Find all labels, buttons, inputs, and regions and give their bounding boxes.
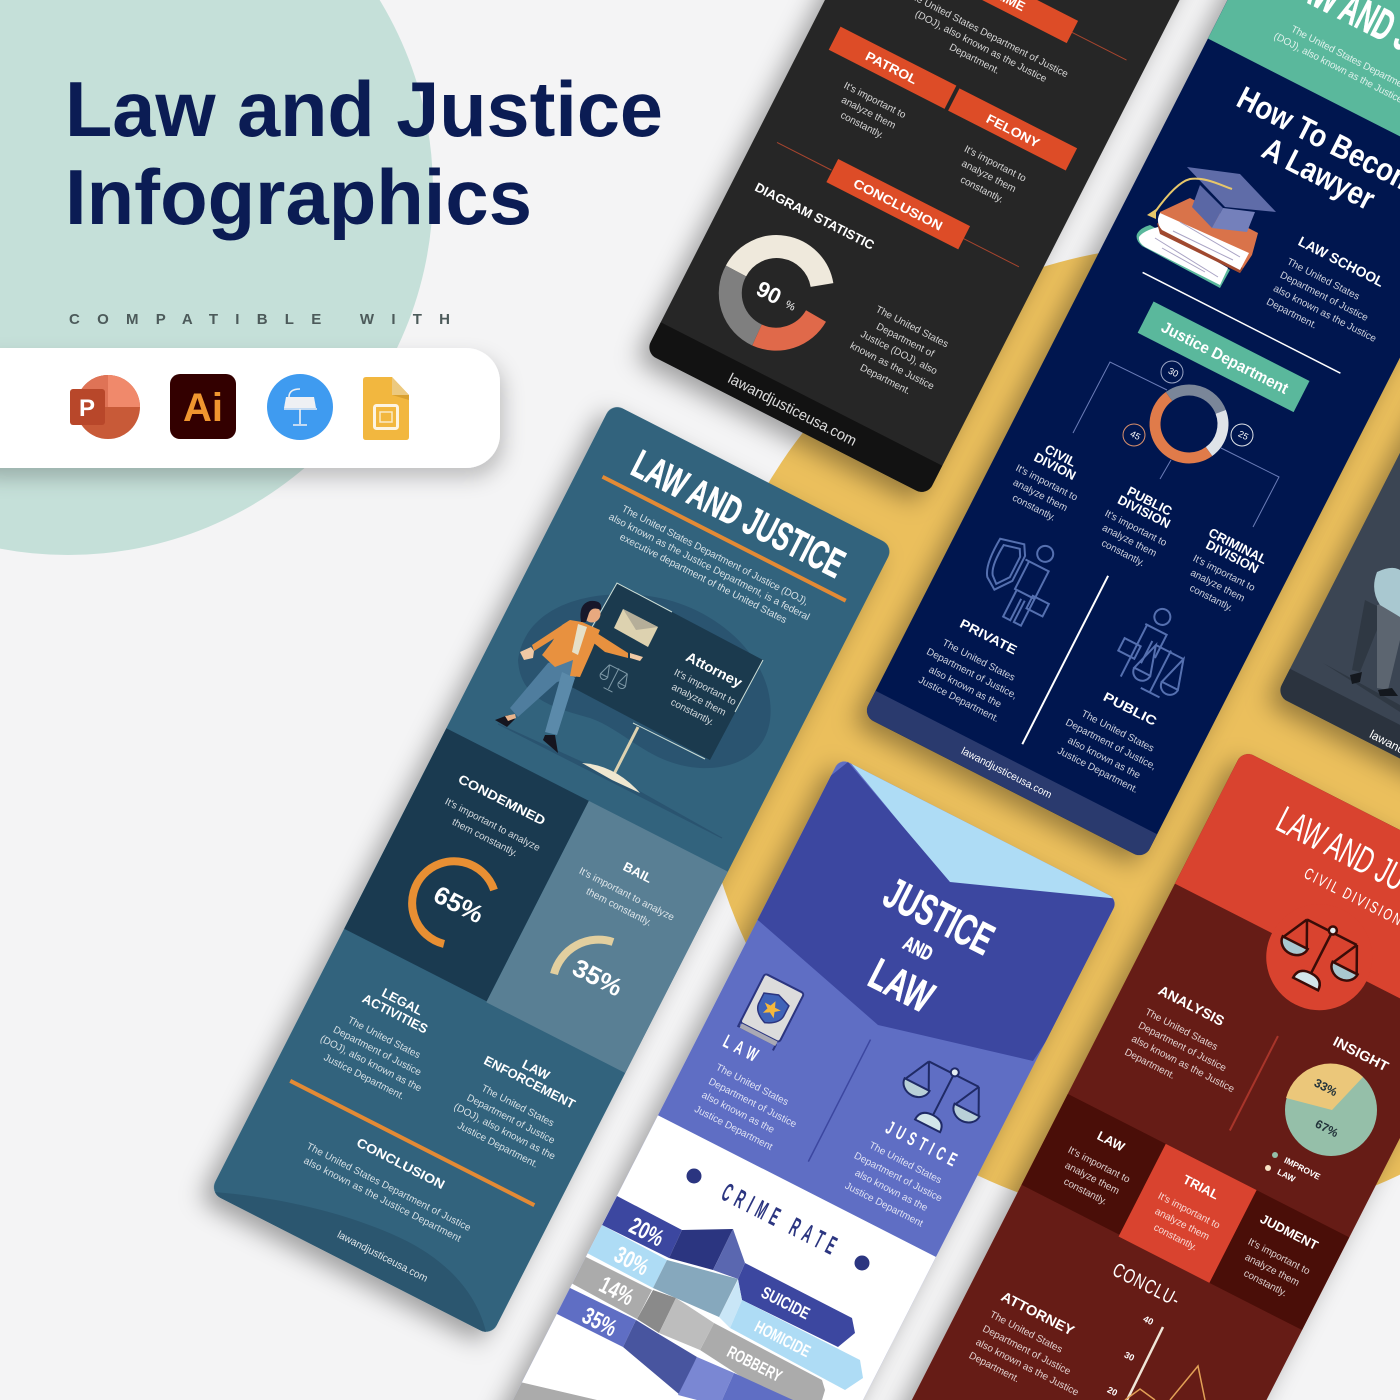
tag: crime xyxy=(982,0,1078,44)
patrol text xyxy=(841,82,906,138)
panel: law: analyze them xyxy=(1063,1160,1121,1197)
panel: judment: analyze them xyxy=(1243,1252,1301,1289)
mint background circle xyxy=(0,0,433,555)
attorney: ATTORNEY xyxy=(999,1288,1078,1339)
attorney text xyxy=(659,647,749,733)
civil division: CIVIL xyxy=(1042,441,1079,470)
criminal division: constantly. xyxy=(1188,583,1234,614)
analysis: Department of Justice xyxy=(1136,1020,1228,1074)
background blob xyxy=(518,594,771,768)
crime text: (DOJ), also known as the Justice xyxy=(913,9,1049,85)
civil division: analyze them xyxy=(1011,477,1069,514)
crime text: Department. xyxy=(947,42,1001,77)
line chart: 20 xyxy=(1106,1385,1119,1398)
progress ring 35% xyxy=(554,940,613,974)
law enforcement xyxy=(445,1038,590,1176)
title: AND xyxy=(899,932,936,966)
legal activities: Department of Justice xyxy=(331,1025,423,1079)
white lower section xyxy=(513,1115,936,1400)
title: LAW AND JUSTICE xyxy=(625,442,852,587)
law school: LAW SCHOOL xyxy=(1296,233,1387,290)
public xyxy=(1058,692,1156,793)
analysis xyxy=(1123,981,1263,1109)
panel: blue card xyxy=(490,758,1115,1400)
icon: books and graduation cap xyxy=(1137,167,1276,288)
pie chart xyxy=(1285,1064,1377,1156)
law enforcement: The United States xyxy=(479,1083,556,1129)
law enforcement: (DOJ), also known as the xyxy=(452,1102,557,1163)
criminal division: analyze them xyxy=(1188,568,1246,604)
public division: It's important to xyxy=(1103,508,1169,549)
attorney: Department of Justice xyxy=(981,1324,1073,1378)
public division: constantly. xyxy=(1099,538,1146,569)
donut value: % xyxy=(783,299,797,314)
panel: judment: constantly. xyxy=(1242,1268,1289,1299)
panel: judment: It's important to xyxy=(1246,1237,1312,1278)
analysis: also known as the Justice xyxy=(1129,1034,1236,1095)
connector lines xyxy=(1073,362,1279,527)
attorney text: It's important to xyxy=(672,667,738,708)
panel: trial: TRIAL xyxy=(1181,1172,1221,1202)
analysis: The United States xyxy=(1143,1007,1219,1053)
analysis: Department. xyxy=(1123,1047,1177,1082)
panel: law: It's important to xyxy=(1066,1145,1132,1186)
tag: patrol xyxy=(829,27,956,109)
compatible with label: COMPATIBLE WITH xyxy=(69,311,450,328)
icon: Google Slides xyxy=(363,377,409,440)
law text xyxy=(692,1062,806,1158)
chart labels: SUICIDE xyxy=(758,1283,813,1323)
icon: scales xyxy=(890,1050,994,1145)
legal activities: ACTIVITIES xyxy=(360,991,431,1037)
pie legend: LAW xyxy=(1276,1167,1298,1185)
bail text: them constantly. xyxy=(584,886,653,929)
criminal division: It's important to xyxy=(1191,553,1257,594)
attorney xyxy=(967,1287,1106,1400)
justice text: The United States xyxy=(867,1140,943,1186)
statistic text xyxy=(850,305,948,394)
icon: private lawyer xyxy=(986,538,1054,627)
law text: The United States xyxy=(714,1062,790,1108)
tag: conclusion: CONCLUSION xyxy=(851,176,945,234)
legal activities: (DOJ), also known as the xyxy=(318,1034,424,1095)
icon: envelope xyxy=(614,609,658,647)
panel: law xyxy=(1021,1094,1166,1235)
donut value xyxy=(756,282,795,310)
law enforcement: ENFORCEMENT xyxy=(482,1053,578,1112)
progress ring 65% xyxy=(412,861,494,944)
footer url: lawandjusticeusa.com xyxy=(725,370,859,450)
attorney: also known as the Justice xyxy=(974,1337,1081,1399)
chart labels xyxy=(578,1212,814,1386)
panel: judment xyxy=(1209,1190,1349,1330)
donut chart xyxy=(1155,390,1223,458)
value 65%: 65% xyxy=(429,881,488,929)
law enforcement: Department of Justice xyxy=(465,1093,557,1147)
panel: trial: It's important to xyxy=(1156,1191,1222,1232)
law school: also known as the Justice xyxy=(1271,283,1378,345)
yellow background circle xyxy=(699,245,1400,1223)
private: Department of Justice, xyxy=(925,646,1019,702)
intro text: executive department of the United States xyxy=(618,532,788,626)
illustration: attorney figure xyxy=(495,601,643,753)
bail text xyxy=(570,842,688,937)
condemned text: them constantly. xyxy=(450,817,519,859)
conclusion: The United States Department of Justice xyxy=(304,1141,473,1234)
statistic text: known as the Justice xyxy=(848,340,936,393)
donut chart xyxy=(730,247,822,339)
condemned text xyxy=(436,771,555,868)
title: LAW xyxy=(861,950,941,1023)
icon: PowerPoint: P xyxy=(79,395,95,422)
panel: law: LAW xyxy=(1095,1128,1128,1155)
legal activities: The United States xyxy=(346,1015,422,1061)
condemned text: CONDEMNED xyxy=(456,771,548,828)
title xyxy=(867,878,996,1012)
title: JUSTICE xyxy=(876,868,1002,965)
panel: navy card xyxy=(863,0,1400,859)
statistic text: Department. xyxy=(858,362,912,397)
conclusion heading: CONCLU- xyxy=(1109,1258,1185,1312)
heading: diagram statistic: DIAGRAM STATISTIC xyxy=(753,179,877,253)
legal activities: Justice Department. xyxy=(322,1052,406,1102)
private: The United States xyxy=(940,638,1017,684)
line chart: 40 xyxy=(1142,1314,1155,1327)
value badges: 30 xyxy=(1167,366,1180,379)
panel: judment: JUDMENT xyxy=(1258,1211,1321,1253)
condemned text: It's important to analyze xyxy=(443,796,542,854)
private: also known as the xyxy=(927,664,1003,711)
tag: patrol: PATROL xyxy=(863,48,920,87)
3D ribbon chart xyxy=(510,1196,863,1400)
pie legend: IMPROVE xyxy=(1283,1155,1322,1182)
attorney text: constantly. xyxy=(669,697,716,728)
panel: trial xyxy=(1119,1144,1257,1283)
public: Justice Department. xyxy=(1055,746,1140,796)
footer url: lawandjusticeusa.com xyxy=(335,1229,430,1285)
panel: condemned background xyxy=(344,728,589,1001)
icon: PowerPoint xyxy=(70,375,140,439)
footer url: lawandjusticeusa.com xyxy=(959,745,1054,801)
attorney: Department. xyxy=(967,1350,1021,1385)
icon: Illustrator xyxy=(170,374,236,439)
law school xyxy=(1266,236,1382,342)
patrol text: analyze them xyxy=(839,95,897,132)
panel: dark card xyxy=(627,0,1190,511)
icon: Illustrator: Ai xyxy=(183,386,223,430)
bail text: It's important to analyze xyxy=(577,866,676,924)
circle behind scales xyxy=(1248,886,1391,1028)
public division: analyze them xyxy=(1100,523,1158,559)
analysis: ANALYSIS xyxy=(1156,982,1227,1029)
justice text: Department of Justice xyxy=(852,1151,944,1205)
tag: justice department xyxy=(1138,302,1309,412)
private: Justice Department. xyxy=(916,675,1001,725)
icon: law book xyxy=(736,973,804,1051)
chart labels: 14% xyxy=(595,1271,638,1311)
criminal division: CRIMINAL xyxy=(1206,525,1270,567)
public: also known as the xyxy=(1066,735,1142,782)
panel: trial: analyze them xyxy=(1153,1206,1211,1243)
line chart xyxy=(1106,1314,1205,1400)
intro text: also known as the Justice Department, is a federal xyxy=(607,512,811,623)
crime rate heading: CRIME RATE xyxy=(717,1179,846,1263)
felony text: It's important to xyxy=(962,144,1028,185)
law text: Justice Department xyxy=(692,1104,774,1153)
criminal division: DIVISION xyxy=(1204,537,1261,576)
statistic text: Department of xyxy=(874,321,936,360)
public: The United States xyxy=(1079,708,1156,755)
legal activities xyxy=(311,969,456,1108)
felony text xyxy=(960,145,1026,203)
conclusion: also known as the Justice Department xyxy=(302,1155,463,1245)
public division: PUBLIC xyxy=(1125,483,1175,519)
attorney text: analyze them xyxy=(670,682,728,719)
public division xyxy=(1102,486,1172,566)
statistic text: Justice (DOJ), also xyxy=(859,329,939,377)
public division: DIVISION xyxy=(1115,492,1173,531)
civil division: DIVION xyxy=(1032,449,1078,483)
tag: felony: FELONY xyxy=(984,111,1043,151)
conclusion: CONCLUSION xyxy=(354,1135,447,1192)
bottom curved band xyxy=(215,1192,486,1332)
value badges: 25 xyxy=(1237,429,1250,442)
insight heading: INSIGHT xyxy=(1331,1033,1392,1075)
law enforcement: LAW xyxy=(520,1056,553,1083)
presentation board xyxy=(564,583,763,793)
light blue corner xyxy=(851,764,1114,902)
panel: red card xyxy=(845,750,1400,1400)
law school: Department of Justice xyxy=(1278,270,1370,324)
panel: teal card xyxy=(203,403,894,1348)
civil division: constantly. xyxy=(1010,493,1057,524)
pie chart: 33% xyxy=(1312,1076,1340,1099)
icon: public lawyer xyxy=(1117,608,1185,698)
law school: Department. xyxy=(1264,297,1318,331)
public: Department of Justice, xyxy=(1064,717,1158,772)
title: Law and Justice xyxy=(65,65,663,153)
private xyxy=(918,619,1018,722)
law text: Department of Justice xyxy=(706,1076,799,1131)
patrol text: constantly. xyxy=(838,110,885,141)
title xyxy=(65,65,663,241)
chart labels: ROBBERY xyxy=(724,1342,785,1386)
civil division: It's important to xyxy=(1014,463,1080,504)
bail text: BAIL xyxy=(621,859,655,886)
public: PUBLIC xyxy=(1101,689,1160,729)
statistic text: The United States xyxy=(874,304,950,350)
icon: scales on board xyxy=(596,662,631,696)
icon: scales xyxy=(1268,908,1372,1003)
crime rate dots xyxy=(686,1168,870,1270)
attorney text: Attorney xyxy=(683,648,745,691)
panel: law: constantly. xyxy=(1062,1176,1109,1208)
floor shadow xyxy=(498,724,722,838)
illustration: standing figure xyxy=(1323,568,1400,712)
chart labels: 35% xyxy=(578,1302,621,1342)
civil division xyxy=(1012,446,1077,521)
title: Infographics xyxy=(65,153,532,241)
panel: bail background xyxy=(486,801,728,1073)
tag: felony xyxy=(948,88,1077,171)
donut value: 90 xyxy=(752,276,786,309)
panel: trial: constantly. xyxy=(1152,1222,1199,1253)
law enforcement: Justice Department. xyxy=(455,1120,540,1171)
justice text: also known as the xyxy=(853,1168,930,1214)
felony text: analyze them xyxy=(960,158,1018,195)
value 35%: 35% xyxy=(568,954,627,1002)
heading: how to become a lawyer: A Lawyer xyxy=(1257,130,1381,217)
chart labels: HOMICIDE xyxy=(751,1317,814,1361)
chart labels: 20% xyxy=(625,1212,668,1252)
justice heading: JUSTICE xyxy=(882,1118,964,1173)
justice text: Justice Department xyxy=(843,1181,925,1230)
pie chart: 67% xyxy=(1313,1117,1341,1140)
justice text xyxy=(838,1136,951,1232)
law heading: LAW xyxy=(720,1032,766,1069)
tag: conclusion xyxy=(826,159,970,249)
white pill with software icons xyxy=(0,348,500,468)
conclusion xyxy=(298,1115,486,1247)
line chart: 30 xyxy=(1123,1350,1136,1363)
attorney: The United States xyxy=(988,1309,1064,1356)
tag: justice department: Justice Department xyxy=(1158,319,1291,398)
chart labels: 30% xyxy=(610,1241,653,1281)
law school: The United States xyxy=(1285,257,1361,303)
icon: Keynote xyxy=(267,374,333,440)
pie legend xyxy=(1265,1152,1322,1185)
dark blue header xyxy=(758,762,1115,1061)
panel: slate card xyxy=(1258,408,1400,788)
criminal division xyxy=(1190,529,1264,611)
legal activities: LEGAL xyxy=(379,985,425,1018)
value badges xyxy=(1123,361,1253,446)
value badges: 45 xyxy=(1129,429,1142,442)
private: PRIVATE xyxy=(957,616,1020,658)
intro text: The United States Department of Justice (DOJ), xyxy=(620,504,810,608)
law text: also known as the xyxy=(700,1090,776,1136)
felony text: constantly. xyxy=(958,174,1005,206)
patrol text: It's important to xyxy=(842,80,908,121)
